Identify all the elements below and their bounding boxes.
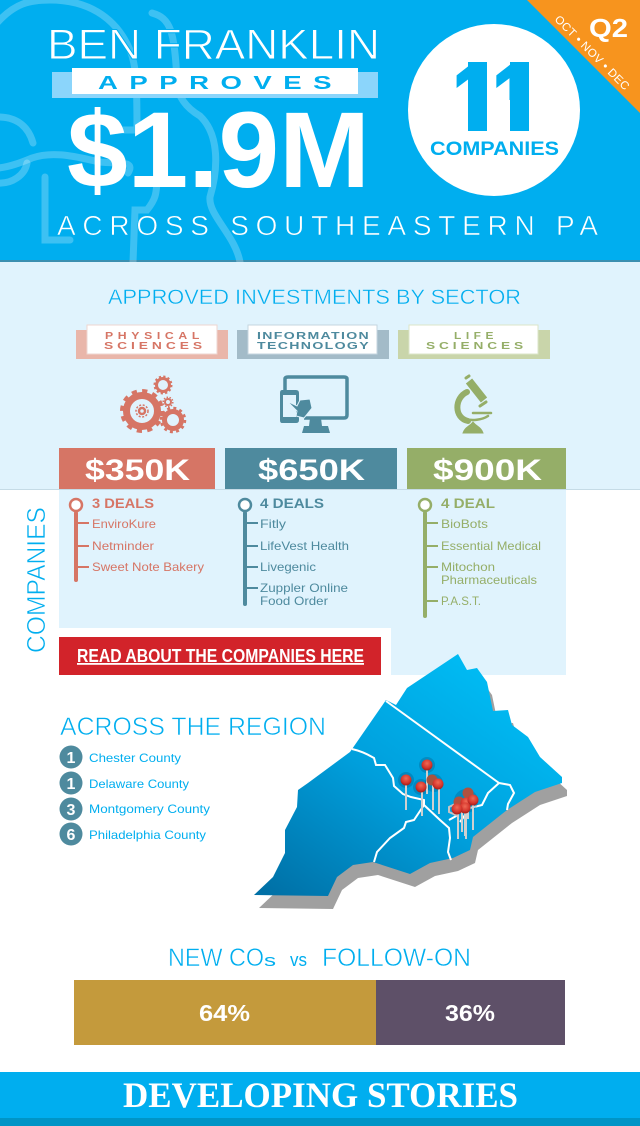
heading: new COs vs follow-on: vs [290,950,307,970]
sector tag: physical sciences: PHYSICAL [105,330,204,342]
bar: 64 percent [74,980,376,1045]
corner ribbon: Q2: OCT • NOV • DEC [552,14,631,93]
list: physical sciences deals: Sweet Note Bakery [92,560,204,574]
county: Chester [60,746,181,768]
value bar: 900K [407,448,566,489]
list: information technology deals: LifeVest Health [260,539,349,553]
section: new companies vs follow-on [74,944,565,1045]
list: information technology deals [239,496,349,608]
panel: approved investments by sector [0,262,640,490]
county: Philadelphia: 6 [67,827,76,844]
list: information technology deals: Zuppler Online [260,581,348,595]
value bar: 900K: $900K [433,454,542,487]
label: companies vertical: COMPANIES [21,507,51,653]
county: Montgomery [60,798,210,820]
county: Montgomery: Montgomery County [89,802,210,816]
subtitle: across southeastern PA: ACROSS SOUTHEASTERN PA [57,210,598,241]
approves ribbon: APPROVES [98,73,343,93]
list: life sciences deals: BioBots [441,517,488,531]
value bar: 350K: $350K [85,454,190,487]
county: Delaware: Delaware County [89,777,189,791]
bar: 36 percent: 36% [445,1000,495,1026]
heading: approved investments: APPROVED INVESTMENTS BY SECTOR [108,286,521,309]
list: life sciences deals: Pharmaceuticals [441,573,537,587]
panel: companies [21,490,566,675]
banner: developing stories [0,1072,640,1126]
list: information technology deals: Food Order [260,594,328,608]
icon: microscope [457,376,491,433]
value bar: 350K [59,448,215,489]
county: Philadelphia: Philadelphia County [89,828,206,842]
bar: 64 percent: 64% [199,1000,250,1026]
icon: monitor and phone [280,377,347,433]
panel: header [0,0,640,262]
county: Delaware: 1 [67,776,76,793]
title: Ben Franklin: BEN FRANKLIN [47,21,380,69]
county: Chester: 1 [67,750,76,767]
list: life sciences deals: Essential Medical [441,539,541,553]
list: physical sciences deals: 3 DEALS [92,496,154,511]
list: information technology deals: Fitly [260,517,286,531]
county: Philadelphia [60,822,206,846]
list: physical sciences deals: Netminder [92,539,154,553]
button: read about the companies [59,637,381,675]
map: southeastern PA [254,654,567,909]
amount: $1.9M: $1.9M [67,89,370,210]
sector tag: physical sciences [76,325,228,359]
sector tag: information technology: TECHNOLOGY [257,340,370,352]
map pins [398,757,478,839]
heading: new COs vs follow-on: NEW CO [168,944,264,972]
sector tag: life sciences: LIFE [454,330,498,342]
circle: 11 companies [408,24,580,196]
approves ribbon [52,68,378,98]
section: across the region list [60,713,326,846]
list: physical sciences deals [70,496,204,582]
sector tag: physical sciences: SCIENCES [104,340,206,352]
list: life sciences deals: 4 DEAL [441,496,495,511]
list: life sciences deals: P.A.S.T. [441,594,481,608]
heading: new COs vs follow-on [168,944,471,972]
value bar: 650K [225,448,397,489]
circle: 11 companies: 11 [452,45,536,152]
list: life sciences deals [419,496,541,618]
banner: developing stories: DEVELOPING STORIES [123,1075,518,1115]
icon: gears [122,376,185,432]
county: Delaware [60,772,189,794]
list: life sciences deals: Mitochon [441,560,495,574]
county: Montgomery: 3 [67,802,76,819]
list: information technology deals: Livegenic [260,560,316,574]
heading: across the region: ACROSS THE REGION [60,713,326,741]
list: physical sciences deals: EnviroKure [92,517,156,531]
corner ribbon: Q2: Q2 [589,13,628,43]
sector tag: life sciences [398,325,550,359]
button: read about the companies: READ ABOUT THE COMPANIES HERE [77,646,364,666]
sector tag: information technology [237,325,389,359]
value bar: 650K: $650K [258,454,365,487]
list: information technology deals: 4 DEALS [260,496,324,511]
bar: 36 percent [376,980,565,1045]
county: Chester: Chester County [89,751,181,765]
corner ribbon: Q2 [527,0,640,113]
heading: new COs vs follow-on: FOLLOW-ON [322,944,471,972]
sector tag: life sciences: SCIENCES [426,340,527,352]
heading: new COs vs follow-on: s [264,951,276,970]
circle: 11 companies: COMPANIES [430,139,559,160]
sector tag: information technology: INFORMATION [257,330,370,342]
